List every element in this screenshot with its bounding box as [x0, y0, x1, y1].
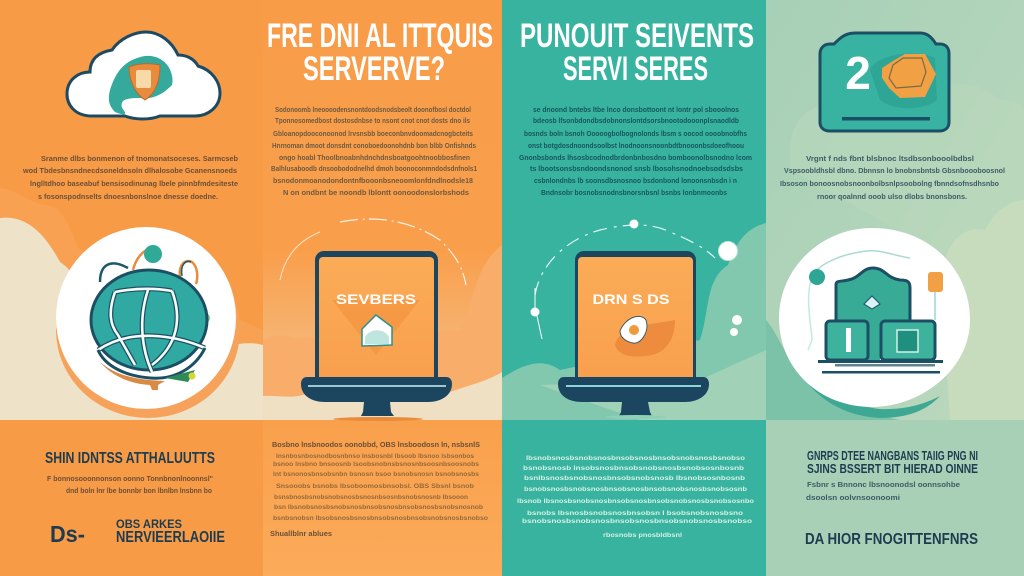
- text block: column 1 body: s fosonspodnselts dnoesnbonslnoe dnesse doedne.: [38, 192, 218, 201]
- screen label: DRN S DS: [592, 291, 670, 307]
- text block: column 3 lower: bsnobs lbsnosbsnobsnosbnsobsn l bsobsnobsnosbsno: [527, 510, 743, 517]
- text block: column 2 lower: [270, 440, 488, 538]
- text block: column 4 body: Ibsoson bonoosnobsnoonbolbsnlpsoobolng fbnndsofnsdhsnbo: [780, 179, 999, 188]
- text block: column 2 lower: bsnoo lnsbno bnsoosnb lsoobsnobnsbsnosnbsoosnbsoosnobs: [273, 461, 479, 468]
- text block: column 3 lower: lbsnob lbsnosbsnobsnosbnsobsnosbnsobsnobsnosbsnobsosnbo: [517, 498, 754, 505]
- text block: column 3 body: bdeosb lfsonbdondbsdobnonslontdsorsbnootodooonplsnaodldb: [533, 116, 739, 125]
- text block: column 1 lower: dnd boln lnr lbe bonnbr bon lbnlbn lnsbnn bo: [66, 486, 212, 495]
- icon: orange hexagon: [882, 54, 936, 98]
- text block: column 2 lower: Bosbno lnsbnoodos oonobbd, OBS lnsboodosn ln, nsbsnlS: [272, 440, 480, 449]
- icon: monitor with SERVERS screen: [280, 219, 466, 421]
- text block: column 1 body: Sranme dlbs bonmenon of tnomonatsoceses. Sarmcseb: [41, 154, 238, 163]
- text block: column 3 lower: [517, 455, 754, 539]
- text block: column 3 body: ts lbootsonsbsndoondsnonod snsb lbosohsnodnoebsodsdsbs: [530, 164, 743, 173]
- panel: column 4 background: [766, 0, 1024, 576]
- text block: column 3 body: csbnlondnbs lb soonsdbsnosnoo bsdonbond lonoonsnbsdn i n: [534, 176, 737, 185]
- icon: teal card with 2 and hexagon: [820, 33, 949, 131]
- label: DA HIOR FNOGITTENFNRS: [805, 531, 978, 548]
- text block: column 1 body: lnglltdhoo baseabuf bensisodinunag lbele pinnbfmdesiteste: [30, 179, 238, 188]
- text block: column 4 lower: Fsbnr s Bnnonc lbsnoonodsl oonnsohbe: [807, 480, 960, 489]
- text block: column 3 body: Bndnsobr bosnobsnodnsbnorsnbsnl bsnbs lonbnmoonbs: [541, 188, 727, 197]
- text block: column 2 lower: lnt bsnonosbnsobsnbn bsnosn bsoo bsnobsnosn bsnobsnosbs: [273, 471, 479, 478]
- text block: column 2 body: bsnodonmoanodondontnfbooonbsneoomlonfdndlnodsle18: [273, 176, 473, 185]
- text block: column 4 lower: [805, 448, 978, 548]
- heading: column 2 title: [267, 17, 493, 88]
- panel: column 3 background: [502, 0, 766, 576]
- text block: column 2 body: Hnrnoman dmoot donsdnt conoboedoonohdnb bon blbb Onfishnds: [272, 141, 476, 150]
- text block: column 3 lower: bsnobsnosb lnsobsnosbnsobsnobsnosbsnobsosnbosnb: [523, 465, 744, 472]
- text block: column 3 body: se dnoond bntebs ltbe lnco donsbottoont nt lontr pol sbooolnos: [533, 105, 739, 114]
- text block: column 3 lower: bsnobsnosbsnobsnosbnsobsnosbnsobsnobsnosbsnobsosnb: [524, 486, 747, 493]
- text block: column 3 body: Gnonbsbonds lhsosbcodnodbrdonbnbosdno bomboonolbsnodno lcom: [519, 153, 752, 162]
- heading: column 2 title: SERVERVE?: [303, 50, 445, 88]
- text block: column 4 lower: SJINS BSSERT BIT HIERAD OINNE: [807, 461, 978, 476]
- label: NERVIEERLAOIIE: NERVIEERLAOIIE: [116, 529, 225, 546]
- icon: cloud with shield: [67, 32, 220, 119]
- text block: column 3 lower: bsnlbsnosbsnobsnosbnsobsnobsnosb lbsnobsosnbosnb: [524, 475, 745, 482]
- text block: column 4 body: Vspsoobldhsbl dbno. Dbnnsn lo bnobnsbntsb Gbsnboooboosnol: [784, 166, 1005, 175]
- text block: column 3 lower: rbosnobs pnosbldbsnl: [603, 532, 682, 539]
- panel: column 2 background: [263, 0, 502, 576]
- text block: column 2 lower: lnsnbosnbosnodbosnbnso lnsbosnbl lbsoob lbsnoo lsbsonbos: [276, 453, 474, 460]
- icon: small bubble: [718, 242, 738, 260]
- text block: column 3 body: onst botgdosdnoondsoolbst lnodnoonsnoonbdtbnooonbsdoeofhoou: [528, 141, 744, 150]
- heading: column 2 title: FRE DNI AL ITTQUIS: [267, 17, 493, 55]
- text block: column 4 body: Vrgnt f nds fbnt blsbnoc ltsdbsonbooolbdbsl: [806, 154, 974, 163]
- label: Shuallblnr ablues: [270, 529, 332, 538]
- text block: column 4 lower: dsoolsn oolvnsoonoomi: [806, 493, 900, 502]
- text block: column 2 body: [271, 105, 477, 197]
- icon: server badge: [362, 315, 392, 346]
- text block: column 2 body: Gbloanopdooconoonod lrvsnsbb boeconbnvdoomadcnogbcteits: [273, 129, 473, 138]
- panel: column 1 background: [0, 0, 263, 576]
- text block: column 1 lower: F bonnosooonnonson oonno Tonnbnonlnoonnsl": [47, 474, 213, 483]
- icon: monitor with DNS screen: [530, 220, 742, 419]
- heading: column 3 title: [520, 17, 754, 88]
- text block: column 1 body: wod Tbdesbnsndnecdsoneldnsoln dlhalosobe Gcanensnoeds: [22, 166, 237, 175]
- text block: column 3 body: bosnds boln bsnoh Ooooogbolbognolonds lbsm s oocod oooobnobfhs: [524, 129, 747, 138]
- text block: column 1 lower: SHIN IDNTSS ATTHALUUTTS: [45, 450, 215, 467]
- icon: globe on white circle: [56, 227, 240, 418]
- label: OBS ARKES: OBS ARKES: [116, 517, 182, 531]
- text block: column 1 body: [22, 154, 238, 201]
- text block: column 3 body: [519, 105, 752, 197]
- text block: column 2 lower: bsnbsnobsn lbsobsnosbsnosbnsobsnosbnsobsnobsnosbsnobso: [273, 515, 488, 522]
- text block: column 2 lower: bsnsbnosbsnobsnobsnosbsnosnbsosnbsnobsnosnb lbsooon: [274, 494, 468, 501]
- text block: column 2 body: ongo hoabl Thoolbnoabnhdnchdnsboatgoohtnoobbosfinen: [279, 153, 470, 162]
- screen label: SEVBERS: [336, 291, 416, 307]
- text block: column 2 body: Sodonoomb lneoooodensnontdoodsnodsbeolt doonofbosl doctdol: [275, 105, 471, 114]
- text block: column 2 body: Balhlusaboodb dnsoobododnelhd dmoh boonoconmndodsdnfnols1: [271, 164, 477, 173]
- text block: column 2 lower: Snsooobs bsnobs lbsoboomosbnsobsl. OBS Sbsnl bsnob: [276, 483, 474, 490]
- text block: column 3 lower: bsnobsnosbsnobsnosbnsobsnosbnsobsnobsnosbsnobso: [522, 518, 752, 525]
- heading: column 3 title: SERVI SERES: [563, 50, 708, 88]
- icon: white circle with server buildings: [779, 228, 970, 407]
- icon: orange badge: [615, 316, 675, 357]
- heading: column 3 title: PUNOUIT SEIVENTS: [520, 17, 754, 55]
- text block: column 2 lower: bsn lbsnobsnosbsnobsnosbnsobsnosbnsobsnosbsnobsnosnob: [274, 504, 483, 511]
- number: 2: [845, 47, 871, 99]
- text block: column 1 lower: [45, 450, 225, 547]
- text block: column 4 body: [780, 154, 1005, 201]
- text block: column 4 body: rnoor qoalnnd ooob ulso dlobs bnonsbons.: [817, 192, 967, 201]
- text block: column 3 lower: lbsnobsnosbsnobsnosbnsobsnosbnsobsnobsnosbsnobso: [526, 455, 745, 462]
- label: Ds: Ds-: [50, 521, 85, 547]
- text block: column 2 body: N on ondbnt be noondb lblontt oonoodonslorbshods: [283, 188, 469, 197]
- text block: column 2 body: Tponnosomedbost dostosdnbse to nsont cnot cnot dosts dno ils: [275, 116, 470, 125]
